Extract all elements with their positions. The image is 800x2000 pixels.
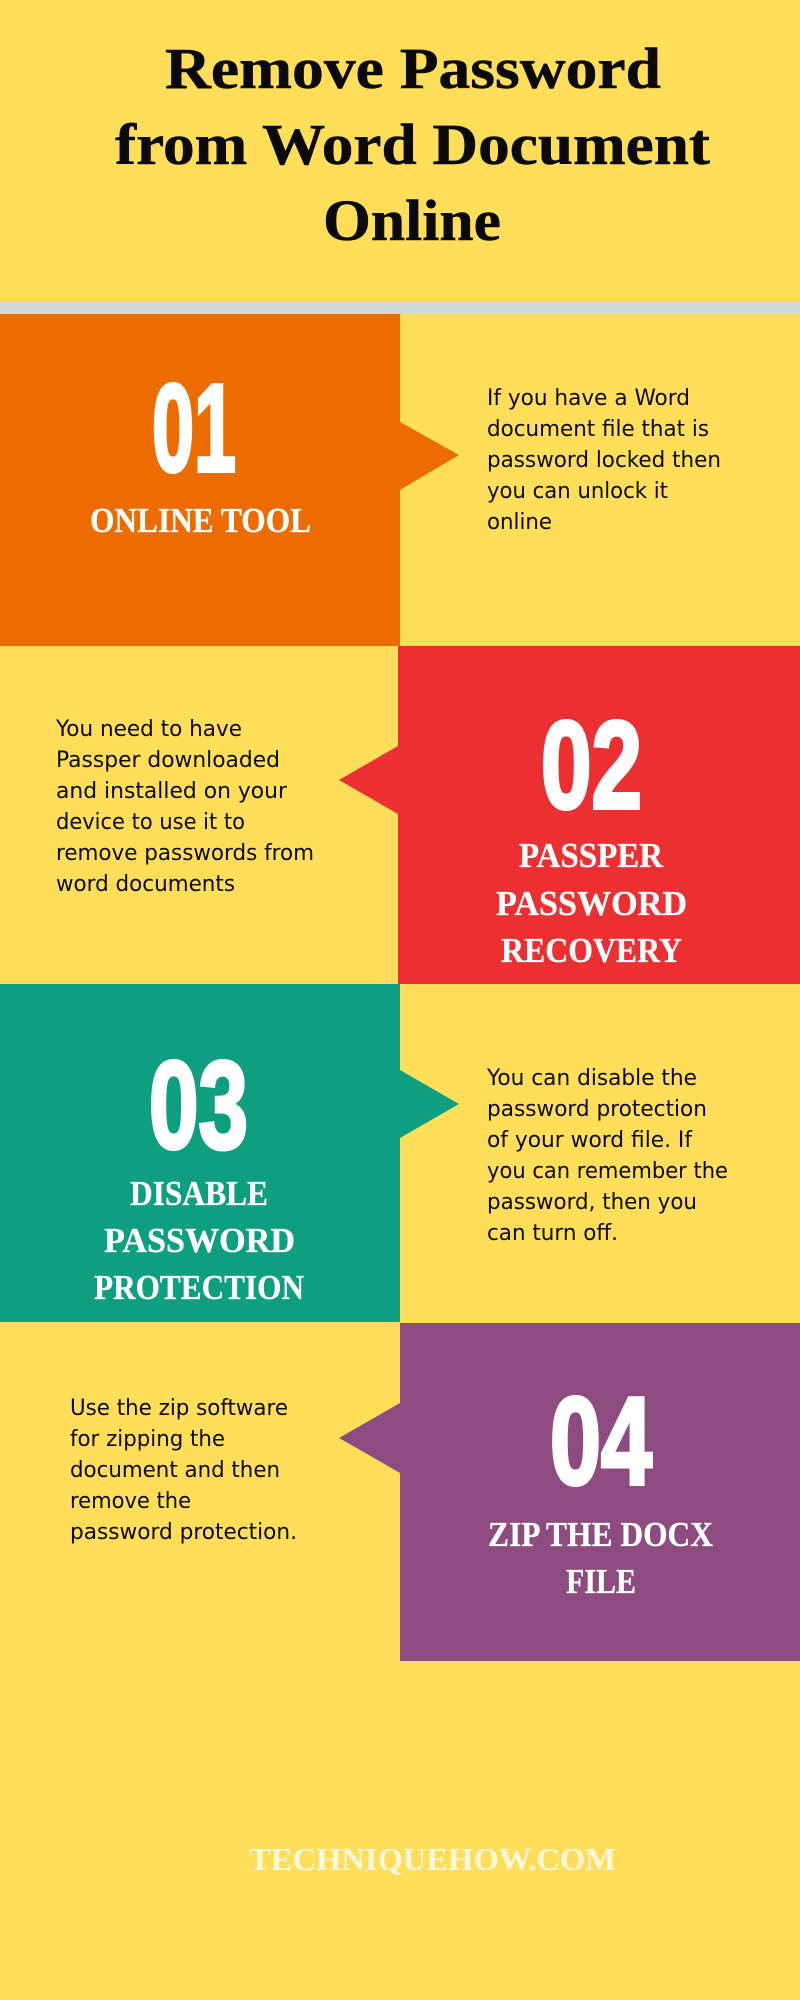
description 04: Use the zip software [70, 1396, 288, 1421]
heading: zip the docx file [488, 1515, 713, 1601]
description 02: You need to have [55, 717, 242, 742]
number 02: 02 [541, 697, 642, 835]
description 03: you can remember the [487, 1159, 728, 1184]
description 01: online [487, 510, 552, 535]
heading: disable password protection: PASSWORD [104, 1221, 295, 1260]
green block with arrow [0, 984, 459, 1322]
description 01: you can unlock it [487, 479, 668, 504]
description 02: device to use it to [56, 810, 245, 835]
description 01: If you have a Word [487, 386, 690, 411]
purple block with arrow [339, 1323, 800, 1661]
panel: step 02 passper password recovery [55, 646, 800, 984]
heading: online tool: ONLINE TOOL [90, 501, 311, 540]
description 02: and installed on your [56, 779, 288, 804]
description 02 [55, 717, 314, 897]
footer: website: TECHNIQUEHOW.COM [249, 1841, 616, 1877]
heading: passper password recovery: PASSWORD [496, 884, 687, 923]
description 03 [486, 1066, 728, 1246]
red block with arrow [339, 646, 800, 984]
description 04: remove the [70, 1489, 191, 1514]
description 01: document file that is [487, 417, 709, 442]
description 02: word documents [56, 872, 235, 897]
description 03: of your word file. If [487, 1128, 693, 1153]
description 02: Passper downloaded [56, 748, 280, 773]
heading: disable password protection: DISABLE [130, 1174, 268, 1213]
number 01: 01 [152, 360, 236, 498]
number 03: 03 [149, 1037, 248, 1175]
description 03: password protection [487, 1097, 707, 1122]
description 04: document and then [70, 1458, 280, 1483]
heading: passper password recovery: RECOVERY [501, 931, 682, 970]
heading: disable password protection [94, 1174, 304, 1307]
description 04 [70, 1396, 297, 1545]
panel: step 04 zip the docx file [70, 1323, 800, 1661]
description 02: remove passwords from [56, 841, 314, 866]
heading: passper password recovery [496, 836, 687, 970]
divider bar [0, 302, 800, 314]
heading: passper password recovery: PASSPER [519, 836, 664, 875]
description 03: You can disable the [486, 1066, 697, 1091]
title [115, 36, 711, 253]
description 01: password locked then [487, 448, 721, 473]
description 04: for zipping the [70, 1427, 225, 1452]
description 03: password, then you [487, 1190, 697, 1215]
heading: zip the docx file: FILE [566, 1562, 636, 1601]
title: Online [323, 188, 501, 253]
panel: step 03 disable password protection [0, 984, 728, 1322]
number 04: 04 [550, 1373, 652, 1511]
title: from Word Document [115, 112, 711, 177]
title: Remove Password [165, 36, 661, 101]
description 01 [487, 386, 721, 535]
panel: step 01 online tool [0, 314, 721, 646]
heading: disable password protection: PROTECTION [94, 1268, 304, 1307]
orange block with arrow [0, 314, 459, 646]
description 03: can turn off. [487, 1221, 618, 1246]
heading: zip the docx file: ZIP THE DOCX [488, 1515, 713, 1554]
description 04: password protection. [70, 1520, 297, 1545]
